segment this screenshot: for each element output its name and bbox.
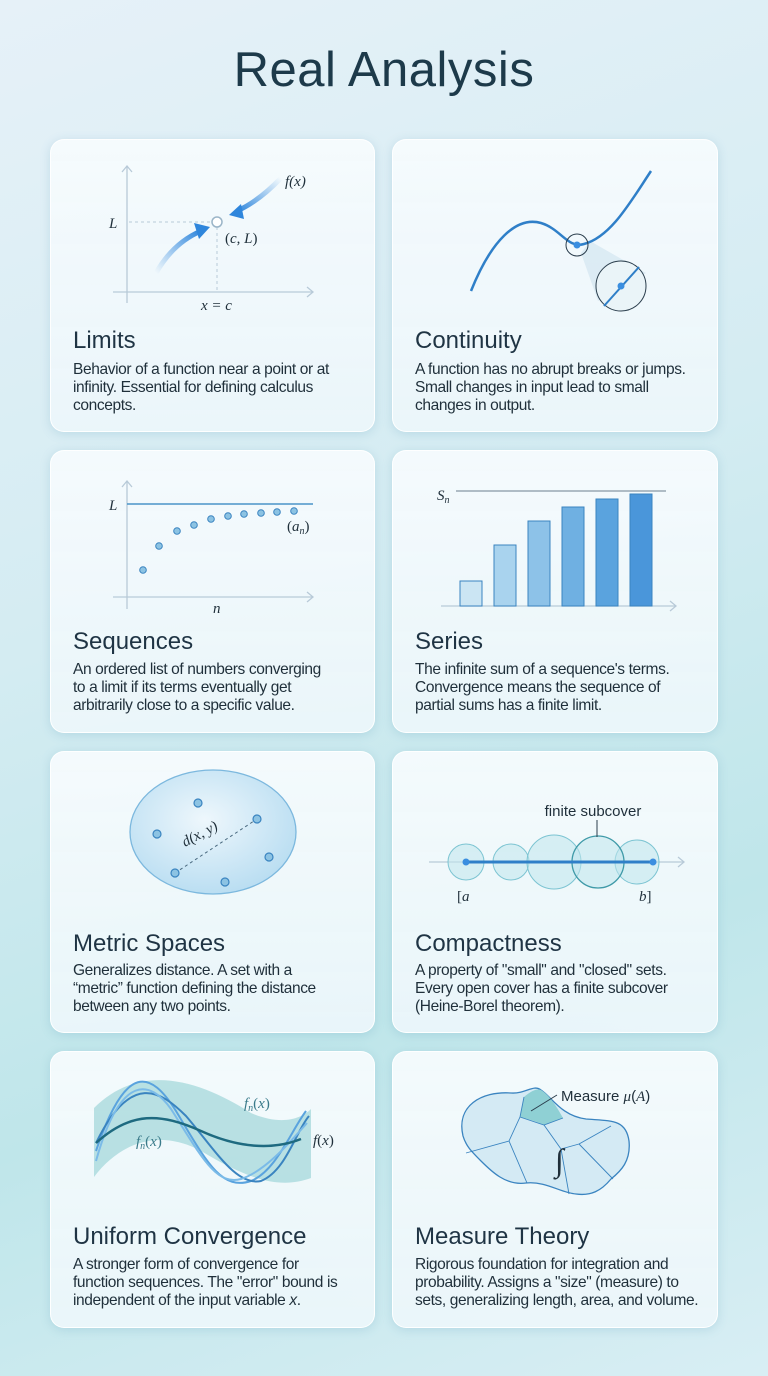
chart: uniform band: ( bbox=[253, 1096, 258, 1112]
text: concepts. bbox=[73, 397, 136, 414]
text: changes in output. bbox=[415, 397, 535, 414]
heading: Limits bbox=[73, 327, 136, 354]
chart: uniform band: f(x) bbox=[313, 1133, 334, 1149]
panel: continuity bbox=[392, 139, 718, 432]
heading: Compactness bbox=[415, 930, 562, 957]
text: Behavior of a function near a point or at bbox=[73, 361, 329, 378]
chart: limit: (c, L) bbox=[225, 231, 258, 247]
chart: metric ball bbox=[129, 769, 297, 895]
title: Real Analysis bbox=[234, 43, 534, 97]
text: Convergence means the sequence of bbox=[415, 679, 660, 696]
chart: limit bbox=[108, 165, 314, 314]
chart: uniform band: n bbox=[248, 1103, 253, 1114]
text bbox=[415, 1256, 698, 1309]
chart: open cover: [a bbox=[457, 889, 470, 905]
text: Small changes in input lead to small bbox=[415, 379, 649, 396]
chart: sequence dots: L bbox=[108, 498, 117, 514]
chart: sequence dots: n bbox=[300, 526, 304, 537]
chart: limit: f(x) bbox=[285, 174, 306, 190]
text: A function has no abrupt breaks or jumps. bbox=[415, 361, 686, 378]
text: sets, generalizing length, area, and volume. bbox=[415, 1292, 698, 1309]
text bbox=[73, 661, 321, 714]
chart: sequence dots: n bbox=[213, 601, 220, 617]
text: “metric” function defining the distance bbox=[73, 980, 316, 997]
chart: sequence dots: ) bbox=[304, 519, 310, 535]
chart: sequence dots: (a bbox=[287, 519, 300, 535]
panel: compactness bbox=[392, 751, 718, 1033]
chart: limit: L bbox=[108, 216, 117, 232]
text: Generalizes distance. A set with a bbox=[73, 962, 292, 979]
chart: limit: x = c bbox=[200, 298, 232, 314]
text bbox=[415, 962, 668, 1015]
chart: metric ball: d(x, y) bbox=[179, 818, 221, 851]
chart: uniform band bbox=[94, 1080, 334, 1184]
chart: open cover: b] bbox=[639, 889, 652, 905]
text: A property of "small" and "closed" sets. bbox=[415, 962, 667, 979]
text: A stronger form of convergence for bbox=[73, 1256, 299, 1273]
text: function sequences. The "error" bound is bbox=[73, 1274, 337, 1291]
chart: uniform band: ( bbox=[145, 1134, 150, 1150]
panel: metric spaces bbox=[50, 751, 375, 1033]
text bbox=[73, 361, 330, 414]
text: The infinite sum of a sequence's terms. bbox=[415, 661, 669, 678]
chart: partial sums bars bbox=[437, 488, 677, 612]
panel: limits bbox=[50, 139, 375, 432]
chart: continuity curve bbox=[470, 170, 652, 312]
chart: uniform band: f bbox=[244, 1096, 248, 1112]
panel: series bbox=[392, 450, 718, 733]
chart: uniform band: f bbox=[136, 1134, 140, 1150]
text bbox=[73, 962, 316, 1015]
text: partial sums has a finite limit. bbox=[415, 697, 602, 714]
text: Every open cover has a finite subcover bbox=[415, 980, 668, 997]
heading: Measure Theory bbox=[415, 1223, 589, 1250]
text: An ordered list of numbers converging bbox=[73, 661, 321, 678]
text: probability. Assigns a "size" (measure) to bbox=[415, 1274, 679, 1291]
panel: measure theory bbox=[392, 1051, 718, 1328]
text: (Heine-Borel theorem). bbox=[415, 998, 564, 1015]
text bbox=[415, 361, 686, 414]
panel: uniform convergence bbox=[50, 1051, 375, 1328]
text: between any two points. bbox=[73, 998, 231, 1015]
heading: Series bbox=[415, 628, 483, 655]
heading: Sequences bbox=[73, 628, 193, 655]
heading: Uniform Convergence bbox=[73, 1223, 306, 1250]
panel: sequences bbox=[50, 450, 375, 733]
chart: open cover: finite subcover bbox=[545, 803, 641, 820]
chart: measurable set bbox=[461, 1087, 650, 1196]
chart: measurable set: Measure μ(A) bbox=[561, 1088, 650, 1105]
text: infinity. Essential for defining calculus bbox=[73, 379, 313, 396]
chart: uniform band: x) bbox=[258, 1096, 270, 1112]
heading: Metric Spaces bbox=[73, 930, 225, 957]
text bbox=[415, 661, 669, 714]
text bbox=[73, 1256, 338, 1309]
chart: uniform band: n bbox=[140, 1141, 145, 1152]
chart: partial sums bars: S bbox=[437, 488, 444, 504]
chart: open cover bbox=[429, 803, 685, 905]
heading: Continuity bbox=[415, 327, 522, 354]
text: independent of the input variable x. bbox=[73, 1292, 301, 1309]
text: Rigorous foundation for integration and bbox=[415, 1256, 668, 1273]
chart: uniform band: x) bbox=[150, 1134, 162, 1150]
chart: measurable set: ∫ bbox=[553, 1142, 566, 1180]
chart: partial sums bars: n bbox=[444, 495, 450, 506]
chart: sequence dots bbox=[108, 480, 314, 617]
text: arbitrarily close to a specific value. bbox=[73, 697, 295, 714]
text: to a limit if its terms eventually get bbox=[73, 679, 291, 696]
